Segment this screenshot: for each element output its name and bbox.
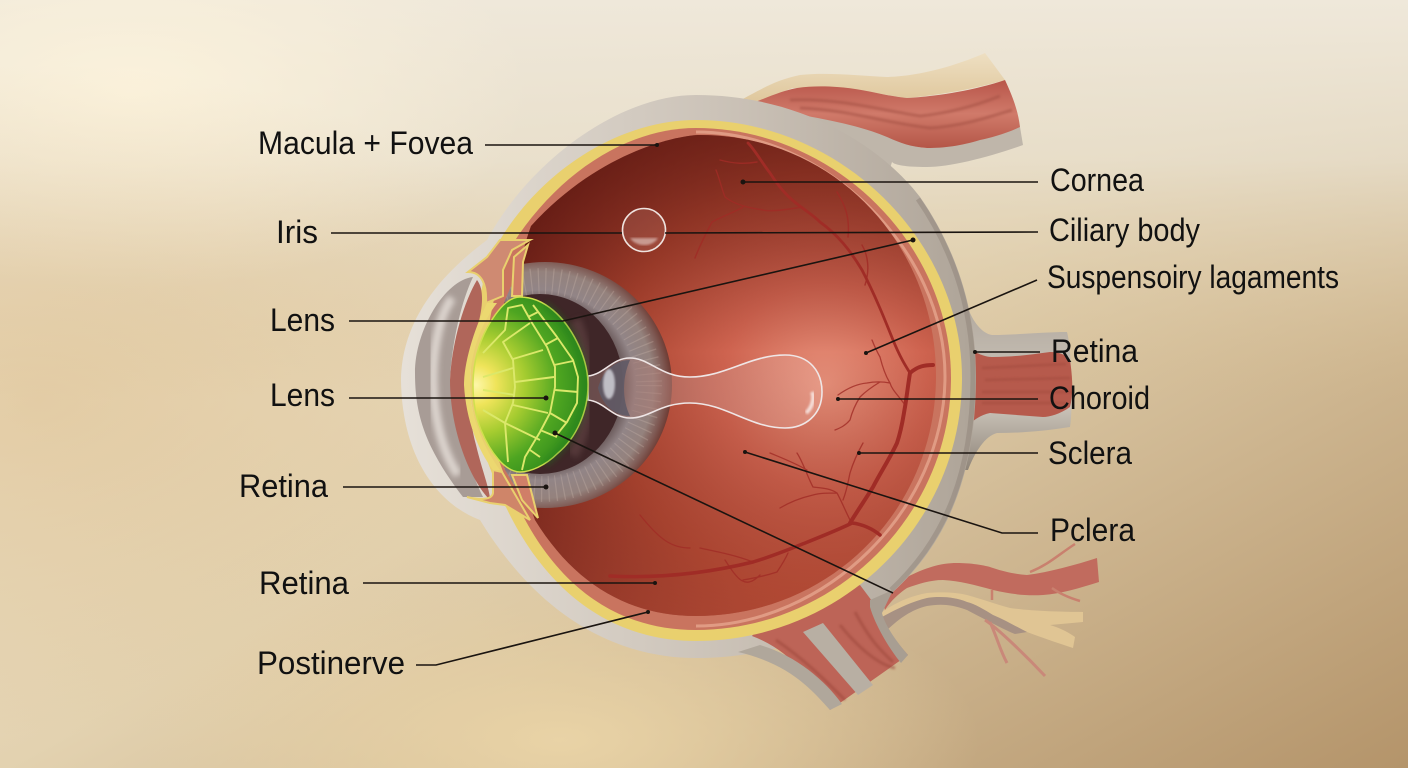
upper anterior tissue bbox=[468, 240, 530, 303]
lower right vessels bbox=[882, 544, 1099, 676]
artery bbox=[883, 558, 1099, 610]
lower ciliary strip bbox=[512, 475, 538, 518]
label: lens lower: Lens bbox=[270, 377, 335, 413]
inferior muscle bbox=[738, 585, 908, 710]
cornea and anterior chamber bbox=[415, 240, 538, 520]
muscle: centre stripe bbox=[803, 623, 873, 695]
nerve bundle bbox=[882, 592, 1083, 648]
label: iris: Iris bbox=[276, 214, 318, 250]
eyeball inner layers bbox=[470, 120, 962, 641]
iris striations bbox=[504, 268, 662, 502]
label: sclera: Sclera bbox=[1048, 435, 1132, 471]
leader lines bbox=[331, 143, 1040, 665]
lower anterior tissue bbox=[467, 470, 530, 520]
muscle: tendon cream bbox=[737, 53, 1005, 102]
air bubble bbox=[622, 208, 666, 252]
posterior cavity bbox=[510, 135, 936, 616]
labels left bbox=[239, 125, 473, 681]
muscle: left sheath bbox=[738, 645, 842, 710]
muscle: right sheath bbox=[870, 590, 908, 663]
label: retina right: Retina bbox=[1051, 333, 1138, 369]
yellow choroid ring bbox=[470, 120, 962, 641]
vitreous dark neck blob bbox=[598, 360, 630, 416]
lens cell lines bbox=[483, 305, 578, 470]
retinal vessels bbox=[610, 143, 933, 582]
label: ciliary body: Ciliary body bbox=[1049, 212, 1200, 248]
label: macula + fovea: Macula + Fovea bbox=[258, 125, 473, 161]
muscle: fibres bbox=[753, 80, 1020, 148]
label: choroid: Choroid bbox=[1049, 380, 1150, 416]
stub fibres bbox=[955, 345, 1072, 423]
vitreous body bbox=[588, 355, 822, 428]
lens dark rim bbox=[545, 305, 585, 463]
label: pclera: Pclera bbox=[1050, 512, 1135, 548]
superior muscle bbox=[737, 53, 1023, 200]
label: lens upper: Lens bbox=[270, 302, 335, 338]
labels right bbox=[1047, 162, 1339, 548]
muscle retina ring bbox=[483, 128, 951, 630]
label: retina: Retina bbox=[239, 468, 328, 504]
muscle: sclera sheath bbox=[760, 100, 1023, 200]
green lens bbox=[473, 297, 588, 472]
upper ciliary strip bbox=[512, 245, 528, 296]
label: postinerve: Postinerve bbox=[257, 645, 405, 681]
cornea crescent bbox=[415, 277, 483, 497]
sclera outer shade bbox=[891, 199, 973, 590]
ciliary pink band bbox=[450, 280, 490, 500]
label: cornea: Cornea bbox=[1050, 162, 1144, 198]
pupil bbox=[504, 294, 620, 474]
iris bbox=[504, 262, 672, 508]
sclera and cornea outer shell bbox=[401, 95, 976, 658]
label: suspensory ligaments: Suspensoiry lagaments bbox=[1047, 259, 1339, 295]
label: retina lower: Retina bbox=[259, 565, 349, 601]
right optic stub bbox=[945, 300, 1072, 470]
yellow rim by lens bbox=[464, 303, 500, 470]
